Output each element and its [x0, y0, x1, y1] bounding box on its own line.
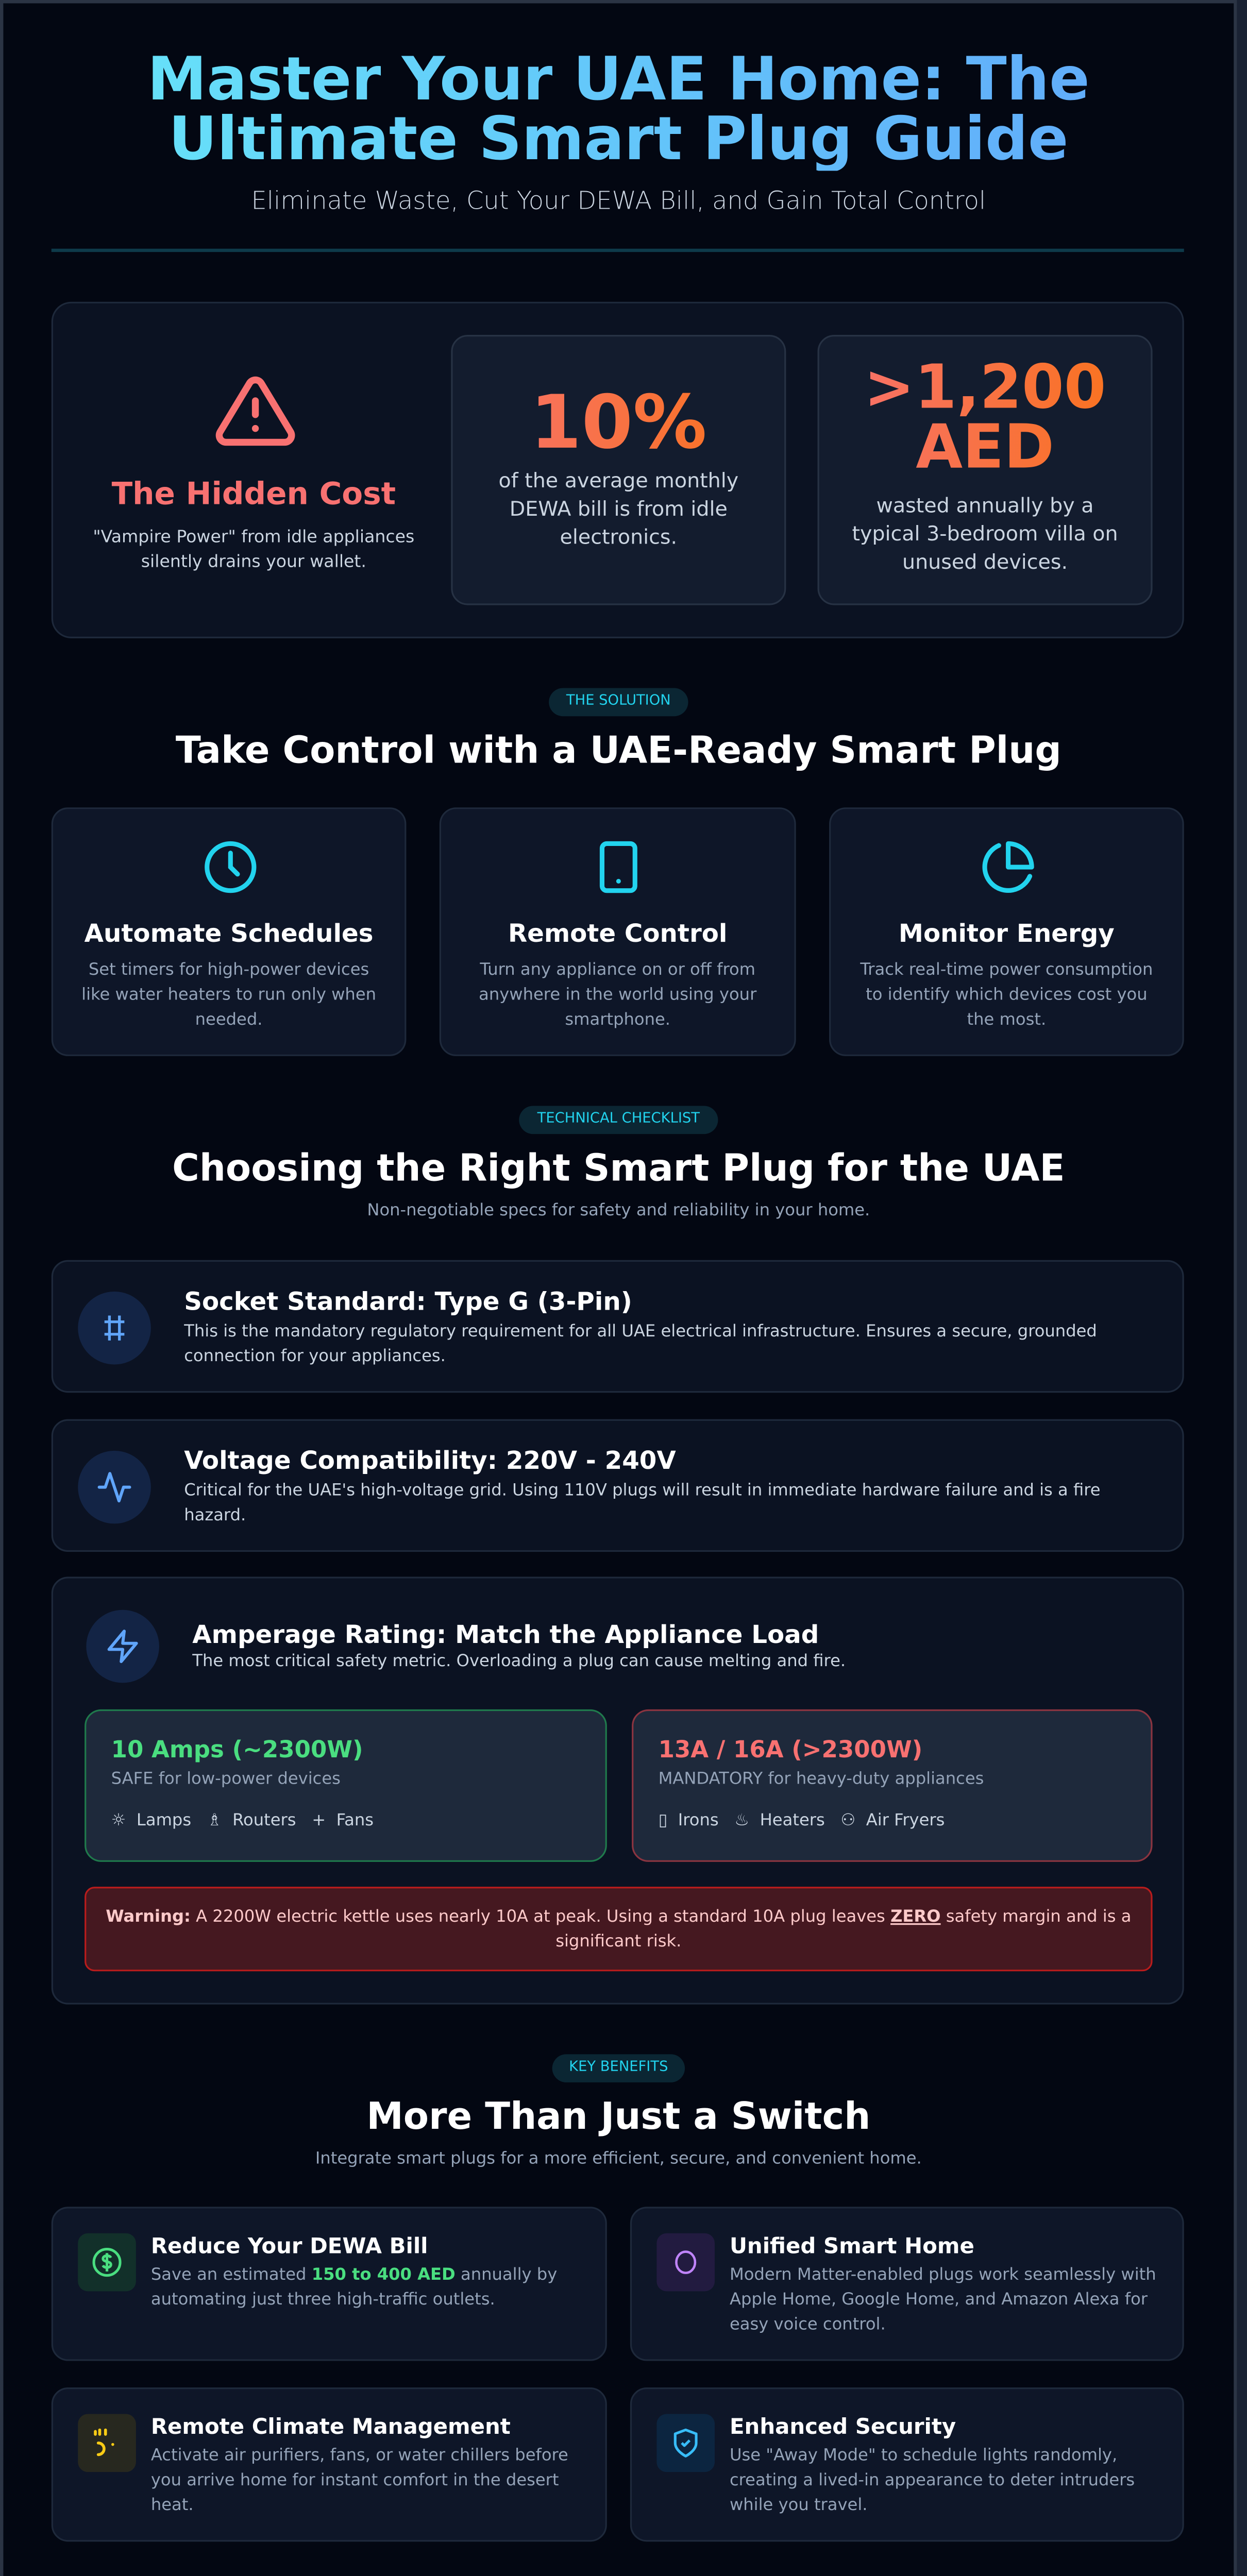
- pill: the solution: [549, 688, 688, 716]
- card: automate schedules: [52, 807, 406, 1056]
- heading: the hidden cost: The Hidden Cost: [112, 478, 396, 512]
- icon: warning triangle: [215, 376, 295, 446]
- card: remote climate: Remote Climate Management: [151, 2416, 511, 2441]
- card: automate schedules: Set timers for high-power devices: [89, 961, 369, 980]
- card: monitor energy: to identify which devices cost you: [866, 987, 1148, 1005]
- box: 10 amps: 10 Amps (~2300W): [111, 1738, 363, 1764]
- pill: key benefits: KEY BENEFITS: [569, 2059, 668, 2076]
- card: unified smart home: Unified Smart Home: [730, 2235, 974, 2260]
- stat: 10%: electronics.: [560, 526, 677, 549]
- stat: 10%: [451, 335, 786, 605]
- card: unified smart home: [630, 2207, 1184, 2361]
- heading: take control: Take Control with a UAE-Ready Smart Plug: [176, 730, 1061, 773]
- card: monitor energy: the most.: [967, 1011, 1046, 1029]
- card: remote control: Remote Control: [508, 919, 727, 948]
- card: remote control: anywhere in the world using your: [479, 987, 756, 1005]
- box: 10 amps: [85, 1709, 607, 1862]
- stat: 1200 AED: typical 3-bedroom villa on: [852, 522, 1118, 546]
- stat: 1200 AED: wasted annually by a: [877, 494, 1093, 517]
- pill: technical checklist: TECHNICAL CHECKLIST: [537, 1111, 700, 1127]
- panel: hidden cost stats: [52, 302, 1184, 638]
- card: reduce bill: [52, 2207, 607, 2361]
- card: monitor energy: Monitor Energy: [899, 919, 1115, 948]
- card: monitor energy: [829, 807, 1184, 1056]
- text: vampire power: [93, 527, 414, 572]
- box: 10 amps: ☼ Lamps ♗ Routers + Fans: [111, 1812, 374, 1831]
- title: Master Your UAE Home: The: [147, 46, 1090, 114]
- card: monitor energy: Track real-time power consumption: [860, 961, 1153, 980]
- card: unified smart home: Modern Matter-enabled plugs work seamlessly with Apple Home, Google Home, and Amazon Alexa for easy voice control.: [730, 2266, 1156, 2334]
- callout: warning: Warning: A 2200W electric kettle uses nearly 10A at peak. Using a standard 10A plug leaves ZERO safety margin and is a significant risk.: [106, 1908, 1131, 1952]
- card: socket standard: [52, 1260, 1184, 1393]
- title: [0, 52, 1237, 171]
- stat: 1200 AED: AED: [916, 411, 1054, 482]
- card: voltage: Voltage Compatibility: 220V - 240V: [184, 1446, 676, 1476]
- box: 13A/16A: ▯ Irons ♨ Heaters ⚇ Air Fryers: [659, 1812, 945, 1831]
- subtitle: specs: Non-negotiable specs for safety and reliability in your home.: [367, 1202, 870, 1221]
- stat: 1200 AED: >1,200: [864, 351, 1106, 423]
- panel: amperage: The most critical safety metric. Overloading a plug can cause melting and fire.: [192, 1653, 846, 1671]
- card: socket standard: Socket Standard: Type G (3-Pin): [184, 1286, 632, 1316]
- stat: 10%: 10%: [530, 381, 707, 466]
- card: reduce bill: Reduce Your DEWA Bill: [151, 2235, 428, 2260]
- title: Ultimate Smart Plug Guide: [168, 106, 1069, 174]
- card: voltage: Critical for the UAE's high-voltage grid. Using 110V plugs will result in immediate hardware failure and is a fire hazard.: [184, 1482, 1101, 1526]
- card: remote climate: [52, 2387, 607, 2541]
- stat: 1200 AED: unused devices.: [902, 550, 1068, 573]
- pill: technical checklist: [519, 1106, 718, 1134]
- panel: amperage: Amperage Rating: Match the Appliance Load: [192, 1620, 819, 1650]
- card: automate schedules: like water heaters to run only when: [81, 987, 376, 1005]
- box: 13A/16A: [632, 1709, 1153, 1862]
- callout: warning: [85, 1887, 1153, 1971]
- card: remote control: Turn any appliance on or off from: [480, 961, 755, 980]
- stat: 10%: DEWA bill is from idle: [510, 497, 728, 520]
- card: automate schedules: Automate Schedules: [85, 919, 374, 948]
- card: enhanced security: Use "Away Mode" to schedule lights randomly, creating a lived-in appearance to deter intruders while you travel.: [730, 2447, 1135, 2515]
- text: vampire power: silently drains your wallet.: [141, 552, 366, 572]
- card: reduce bill: Save an estimated 150 to 400 AED annually by automating just three high-traffic outlets.: [151, 2266, 557, 2310]
- card: remote control: [440, 807, 796, 1056]
- heading: choosing: Choosing the Right Smart Plug for the UAE: [172, 1147, 1065, 1191]
- card: automate schedules: needed.: [195, 1011, 263, 1029]
- card: voltage: [52, 1419, 1184, 1552]
- stat: 1200 AED: [818, 335, 1153, 605]
- subtitle: integrate: Integrate smart plugs for a more efficient, secure, and convenient home.: [315, 2150, 922, 2168]
- card: enhanced security: Enhanced Security: [730, 2416, 956, 2441]
- subtitle: Eliminate Waste, Cut Your DEWA Bill, and Gain Total Control: [251, 185, 986, 215]
- box: 13A/16A: MANDATORY for heavy-duty appliances: [659, 1771, 984, 1789]
- pill: the solution: THE SOLUTION: [566, 693, 671, 709]
- box: 13A/16A: 13A / 16A (>2300W): [659, 1738, 922, 1764]
- card: remote climate: Activate air purifiers, fans, or water chillers before you arrive home for instant comfort in the desert heat.: [151, 2447, 568, 2515]
- heading: more than a switch: More Than Just a Switch: [366, 2096, 870, 2139]
- box: 10 amps: SAFE for low-power devices: [111, 1771, 341, 1789]
- card: enhanced security: [630, 2387, 1184, 2541]
- stat: 10%: of the average monthly: [498, 469, 738, 493]
- pill: key benefits: [552, 2054, 685, 2082]
- text: vampire power: "Vampire Power" from idle appliances: [93, 527, 414, 547]
- panel: amperage: [52, 1577, 1184, 2005]
- card: remote control: smartphone.: [565, 1011, 670, 1029]
- card: socket standard: This is the mandatory regulatory requirement for all UAE electrical infrastructure. Ensures a secure, grounded connection for your appliances.: [184, 1323, 1097, 1366]
